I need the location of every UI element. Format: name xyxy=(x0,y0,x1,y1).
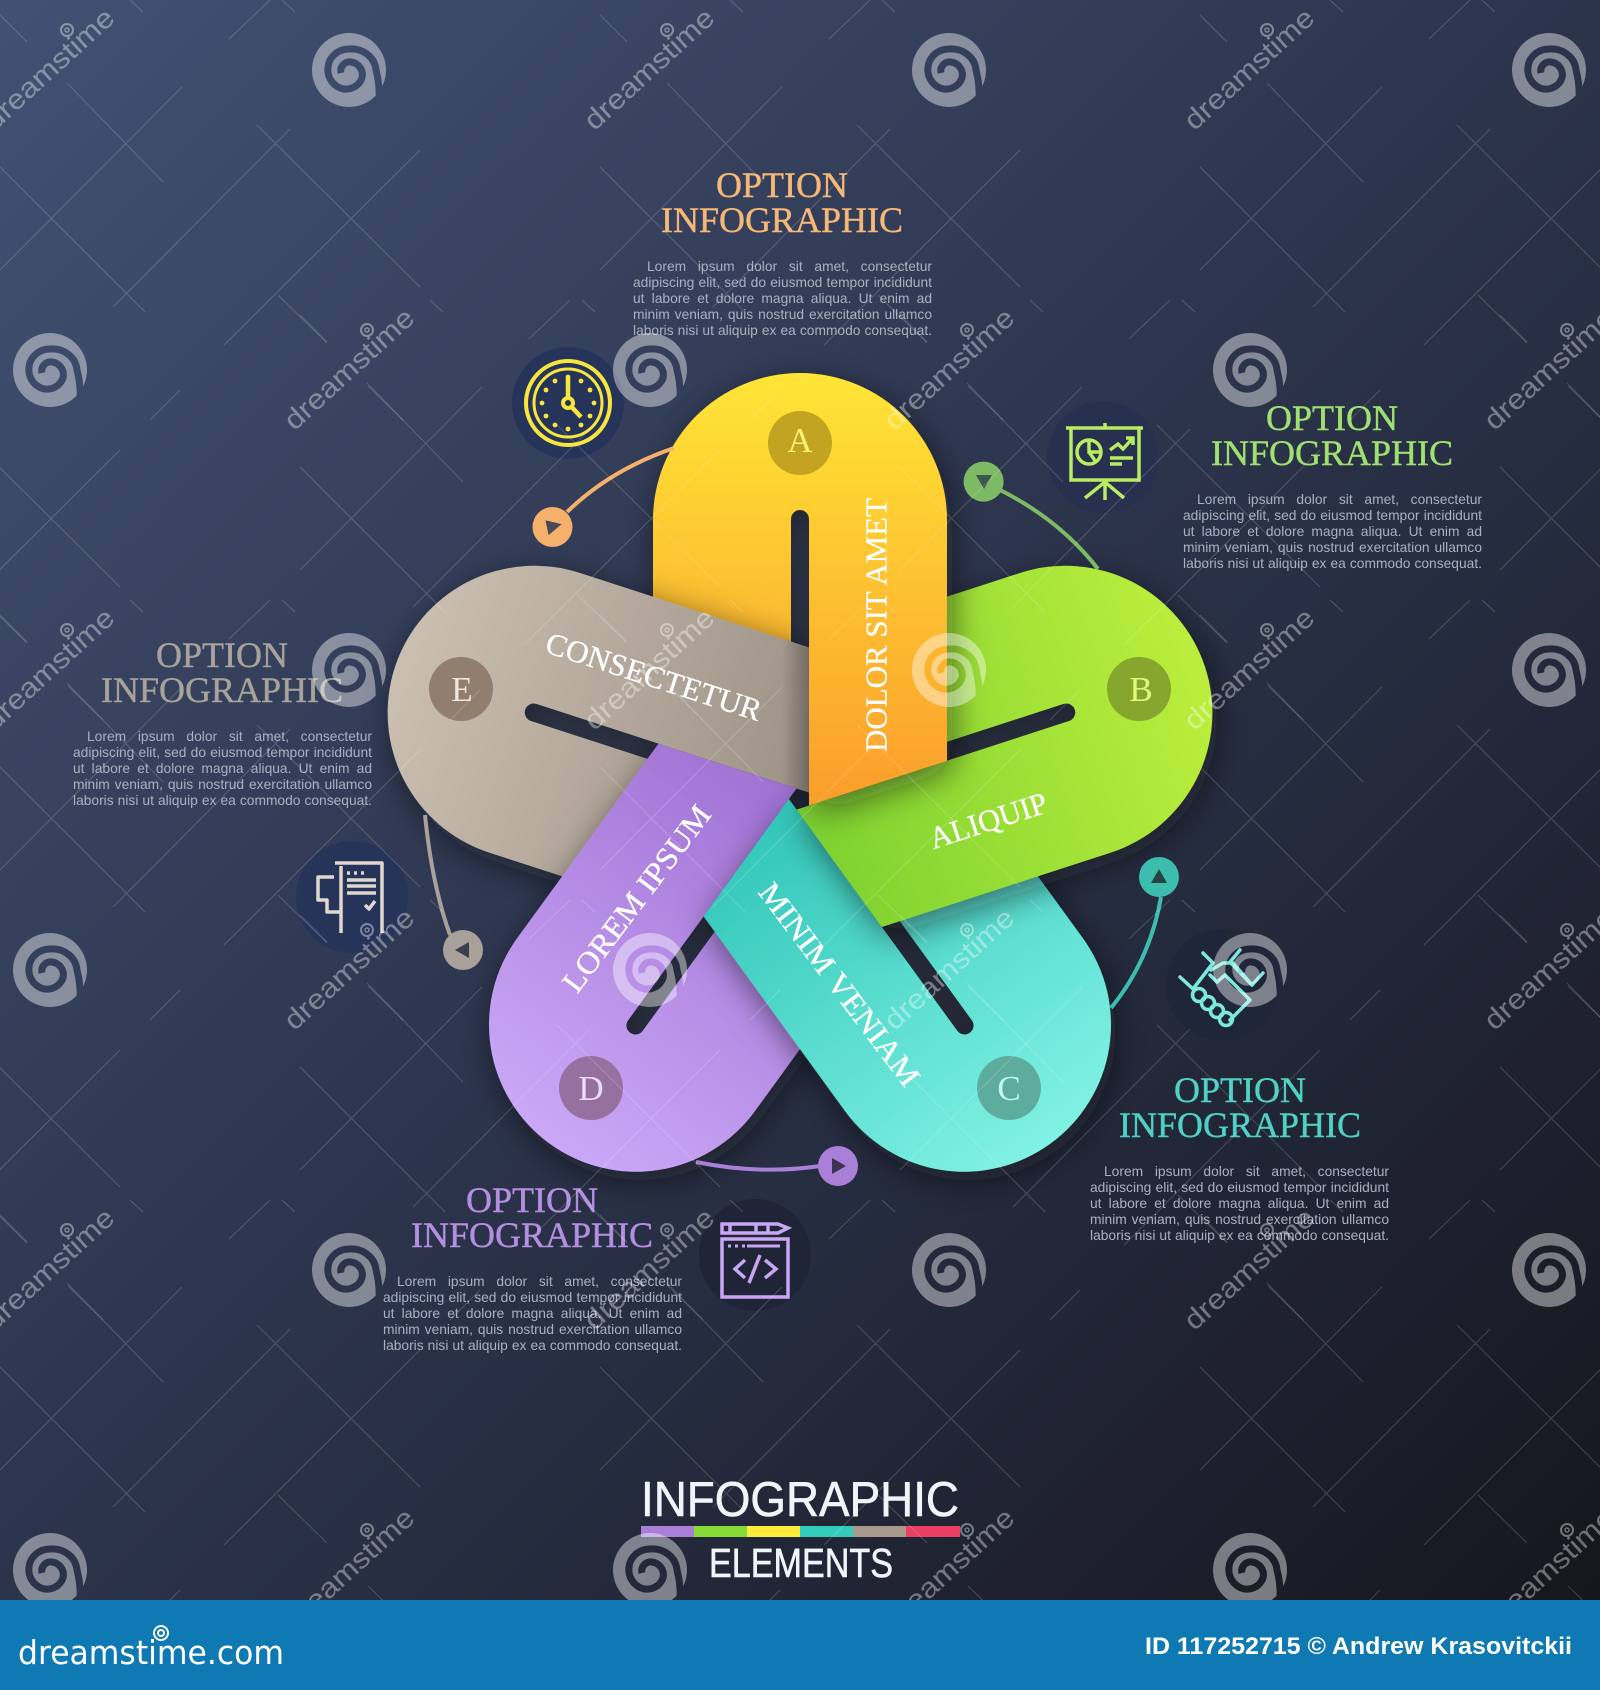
footer logo: dreamstime.com xyxy=(18,1633,284,1672)
badge C: C xyxy=(997,1069,1021,1108)
arrow C xyxy=(1111,857,1179,1008)
petal B xyxy=(748,528,1251,941)
text block A: Lorem ipsum dolor sit amet, consectetur xyxy=(647,259,932,274)
watermark layer: dreamstime xyxy=(878,302,1020,436)
text block C xyxy=(1090,1164,1389,1243)
text block B: minim veniam, quis nostrud exercitation ullamco xyxy=(1183,540,1482,555)
label: minim veniam: MINIM VENIAM xyxy=(752,876,928,1093)
text block A: ut labore et dolore magna aliqua. Ut enim ad xyxy=(633,291,932,306)
text block E xyxy=(73,729,372,808)
label: consectetur: CONSECTETUR xyxy=(541,625,767,728)
main heading xyxy=(641,1473,959,1586)
panel: five woven petals xyxy=(349,373,1251,1230)
footer logo mark xyxy=(154,1626,168,1640)
petal D xyxy=(431,707,923,1230)
badge D: D xyxy=(578,1069,604,1108)
text block E: Lorem ipsum dolor sit amet, consectetur xyxy=(87,729,372,744)
title A: INFOGRAPHIC xyxy=(661,200,903,240)
text block D xyxy=(383,1274,682,1353)
petal E upper band xyxy=(392,560,809,792)
text block D: Lorem ipsum dolor sit amet, consectetur xyxy=(397,1274,682,1289)
main heading: INFOGRAPHIC xyxy=(641,1473,959,1527)
text block A xyxy=(633,259,932,338)
text block D: ut labore et dolore magna aliqua. Ut enim ad xyxy=(383,1306,682,1321)
text block E: laboris nisi ut aliquip ex ea commodo consequat. xyxy=(73,793,372,808)
title B: INFOGRAPHIC xyxy=(1211,433,1453,473)
text block C: laboris nisi ut aliquip ex ea commodo consequat. xyxy=(1090,1228,1389,1243)
text block E: adipiscing elit, sed do eiusmod tempor incididunt xyxy=(73,745,372,760)
icon: clock xyxy=(512,347,624,459)
text block E: ut labore et dolore magna aliqua. Ut enim ad xyxy=(73,761,372,776)
title E xyxy=(101,635,343,710)
label: aliquip: ALIQUIP xyxy=(925,785,1052,856)
title C: OPTION xyxy=(1174,1070,1306,1110)
badge B xyxy=(1107,657,1171,721)
text block A: adipiscing elit, sed do eiusmod tempor incididunt xyxy=(633,275,932,290)
text block B: Lorem ipsum dolor sit amet, consectetur xyxy=(1197,492,1482,507)
title A: OPTION xyxy=(716,165,848,205)
badge A: A xyxy=(787,421,813,460)
text block A: laboris nisi ut aliquip ex ea commodo consequat. xyxy=(633,323,932,338)
title C xyxy=(1119,1070,1361,1145)
badge B: B xyxy=(1129,670,1153,709)
text block E: minim veniam, quis nostrud exercitation ullamco xyxy=(73,777,372,792)
footer bar xyxy=(0,1600,1600,1690)
text block D: adipiscing elit, sed do eiusmod tempor incididunt xyxy=(383,1290,682,1305)
watermark layer: dreamstime xyxy=(1178,2,1320,136)
icon: document xyxy=(296,841,408,953)
label: lorem ipsum: LOREM IPSUM xyxy=(555,798,718,999)
title E: INFOGRAPHIC xyxy=(101,670,343,710)
watermark layer: dreamstime xyxy=(578,2,720,136)
arrow B xyxy=(964,462,1098,569)
watermark layer: dreamstime xyxy=(278,302,420,436)
text block C: adipiscing elit, sed do eiusmod tempor incididunt xyxy=(1090,1180,1389,1195)
label: dolor sit amet: DOLOR SIT AMET xyxy=(858,498,894,752)
watermark layer: dreamstime xyxy=(1178,1202,1320,1336)
title D: INFOGRAPHIC xyxy=(411,1215,653,1255)
badge A xyxy=(768,411,832,475)
band end shading xyxy=(782,638,809,792)
icon: presentation board xyxy=(1047,401,1159,513)
title C: INFOGRAPHIC xyxy=(1119,1105,1361,1145)
title D xyxy=(411,1180,653,1255)
title B xyxy=(1211,398,1453,473)
watermark layer: dreamstime xyxy=(1178,602,1320,736)
text block C: Lorem ipsum dolor sit amet, consectetur xyxy=(1104,1164,1389,1179)
text block D: minim veniam, quis nostrud exercitation ullamco xyxy=(383,1322,682,1337)
text block B xyxy=(1183,492,1482,571)
text block C: minim veniam, quis nostrud exercitation ullamco xyxy=(1090,1212,1389,1227)
title D: OPTION xyxy=(466,1180,598,1220)
text block A: minim veniam, quis nostrud exercitation ullamco xyxy=(633,307,932,322)
badge E: E xyxy=(451,670,473,709)
badge C xyxy=(977,1056,1041,1120)
text block B: laboris nisi ut aliquip ex ea commodo consequat. xyxy=(1183,556,1482,571)
footer credit: ID 117252715 © Andrew Krasovitckii xyxy=(1145,1633,1572,1660)
petal C xyxy=(677,707,1169,1230)
title A xyxy=(661,165,903,240)
title B: OPTION xyxy=(1266,398,1398,438)
petal E lower part xyxy=(378,656,809,893)
title E: OPTION xyxy=(156,635,288,675)
watermark layer: dreamstime xyxy=(578,1202,720,1336)
band labels xyxy=(541,498,1052,1093)
petal A xyxy=(653,373,947,806)
colour strip xyxy=(641,1526,960,1537)
watermark layer: dreamstime xyxy=(278,902,420,1036)
text block B: ut labore et dolore magna aliqua. Ut enim ad xyxy=(1183,524,1482,539)
arrow E xyxy=(425,815,483,970)
main heading: ELEMENTS xyxy=(709,1540,893,1586)
icon: code window xyxy=(699,1199,811,1311)
badge D xyxy=(559,1056,623,1120)
icon: handshake xyxy=(1166,929,1278,1041)
badge E xyxy=(429,657,493,721)
text block B: adipiscing elit, sed do eiusmod tempor incididunt xyxy=(1183,508,1482,523)
text block D: laboris nisi ut aliquip ex ea commodo consequat. xyxy=(383,1338,682,1353)
text block C: ut labore et dolore magna aliqua. Ut enim ad xyxy=(1090,1196,1389,1211)
watermark layer: dreamstime xyxy=(578,602,720,736)
watermark layer: dreamstime xyxy=(878,902,1020,1036)
arrow D xyxy=(696,1146,858,1186)
arrow A xyxy=(532,448,674,547)
